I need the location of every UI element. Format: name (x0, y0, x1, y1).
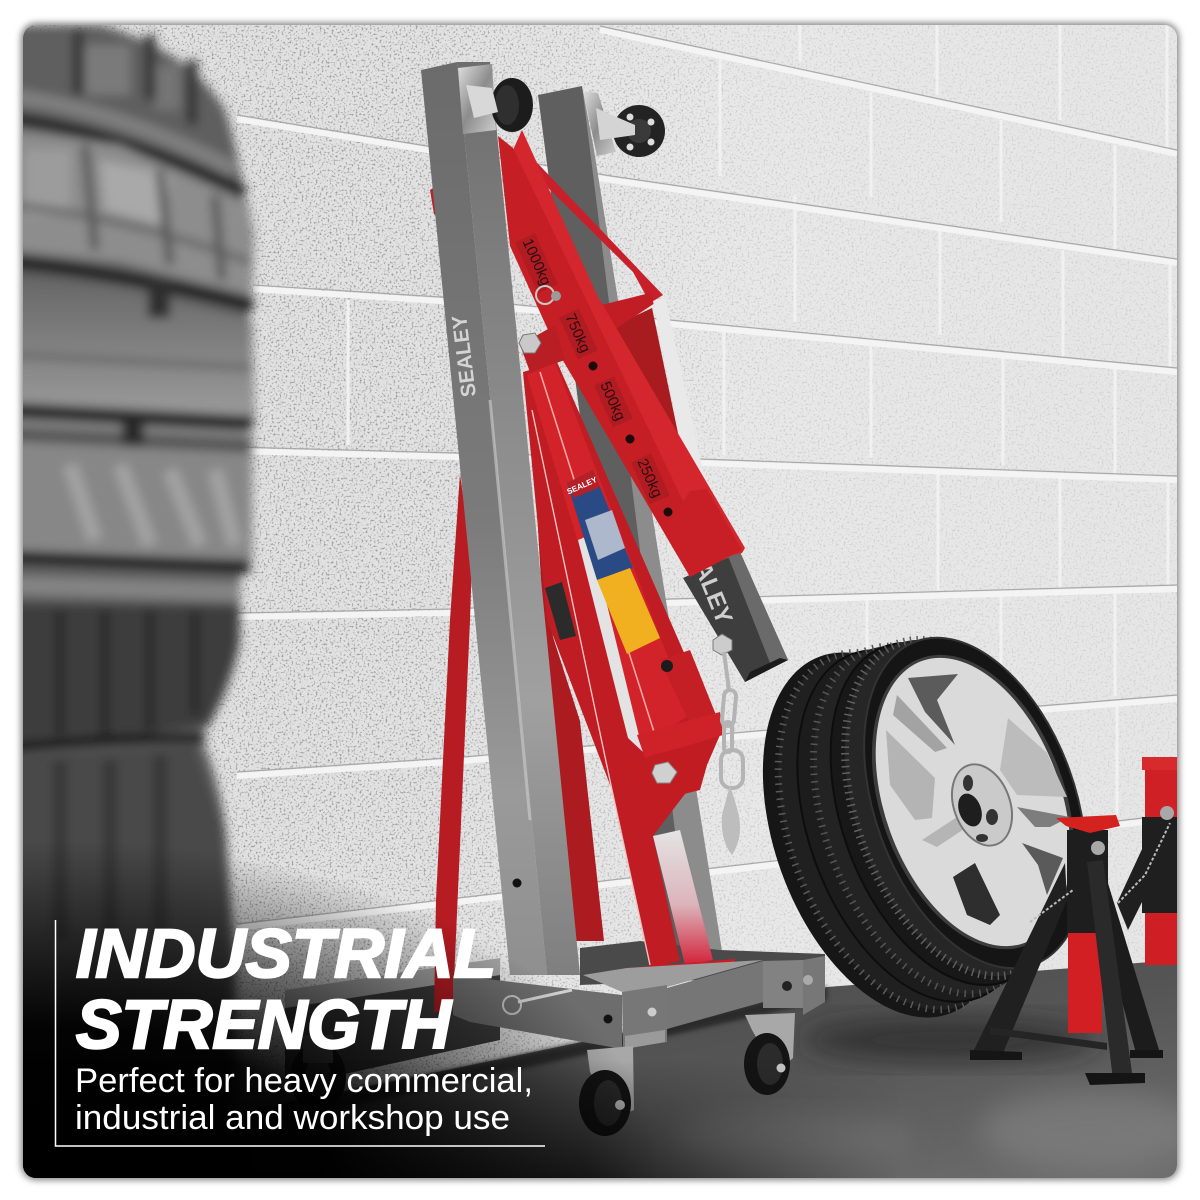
text frame (56, 920, 545, 1146)
subheading: industrial and workshop use (75, 1099, 510, 1137)
subheading: Perfect for heavy commercial, (75, 1062, 533, 1100)
alloy wheel and tyre (762, 636, 1083, 1018)
pivot bolt (519, 325, 565, 372)
hydraulic ram (523, 362, 720, 968)
base frame (453, 956, 825, 1049)
ram label: brand (566, 470, 633, 580)
subheading (75, 1062, 533, 1137)
load labels: 250kg (633, 456, 666, 500)
headline: INDUSTRIAL (76, 915, 496, 992)
rear upright (538, 86, 722, 951)
black grip (545, 582, 576, 640)
lifting chain and hook (721, 652, 743, 855)
front caster (579, 1046, 634, 1136)
garage floor (23, 960, 1200, 1178)
red side brace (537, 518, 604, 941)
dark text backdrop (0, 840, 900, 1200)
top rear caster (583, 91, 665, 157)
top front caster (458, 64, 533, 134)
load labels: 750kg (561, 311, 594, 355)
right caster (744, 1013, 795, 1095)
red boom (498, 130, 745, 577)
load labels: 1000kg (519, 236, 554, 288)
rear chassis and rear caster (285, 958, 500, 1111)
sidewall (863, 636, 1083, 969)
rear axle stand (1117, 757, 1177, 965)
red rear strut (434, 474, 472, 1012)
tread (762, 636, 1042, 1018)
boom gusset and strap (536, 162, 704, 476)
ram label: brand: SEALEY (566, 475, 599, 496)
rim (872, 654, 1073, 950)
ram label: warning (597, 568, 660, 654)
lock pin (536, 286, 561, 304)
load labels: 500kg (596, 379, 629, 423)
rear back beam (580, 941, 825, 985)
frame pin (503, 990, 572, 1014)
headline: STRENGTH (76, 986, 453, 1063)
front upright (421, 62, 580, 975)
upper red stub behind post (430, 188, 436, 216)
arm branding: ALEY (688, 558, 737, 628)
headline (76, 915, 496, 1063)
foot tube (627, 830, 735, 977)
bolt on arm (713, 634, 732, 655)
pump assembly (637, 650, 722, 794)
front axle stand (970, 815, 1163, 1085)
inner extension arm (683, 552, 788, 682)
post brand: SEALEY (448, 314, 481, 398)
load labels (515, 233, 672, 516)
blurred tyre stack (10, 25, 254, 1180)
